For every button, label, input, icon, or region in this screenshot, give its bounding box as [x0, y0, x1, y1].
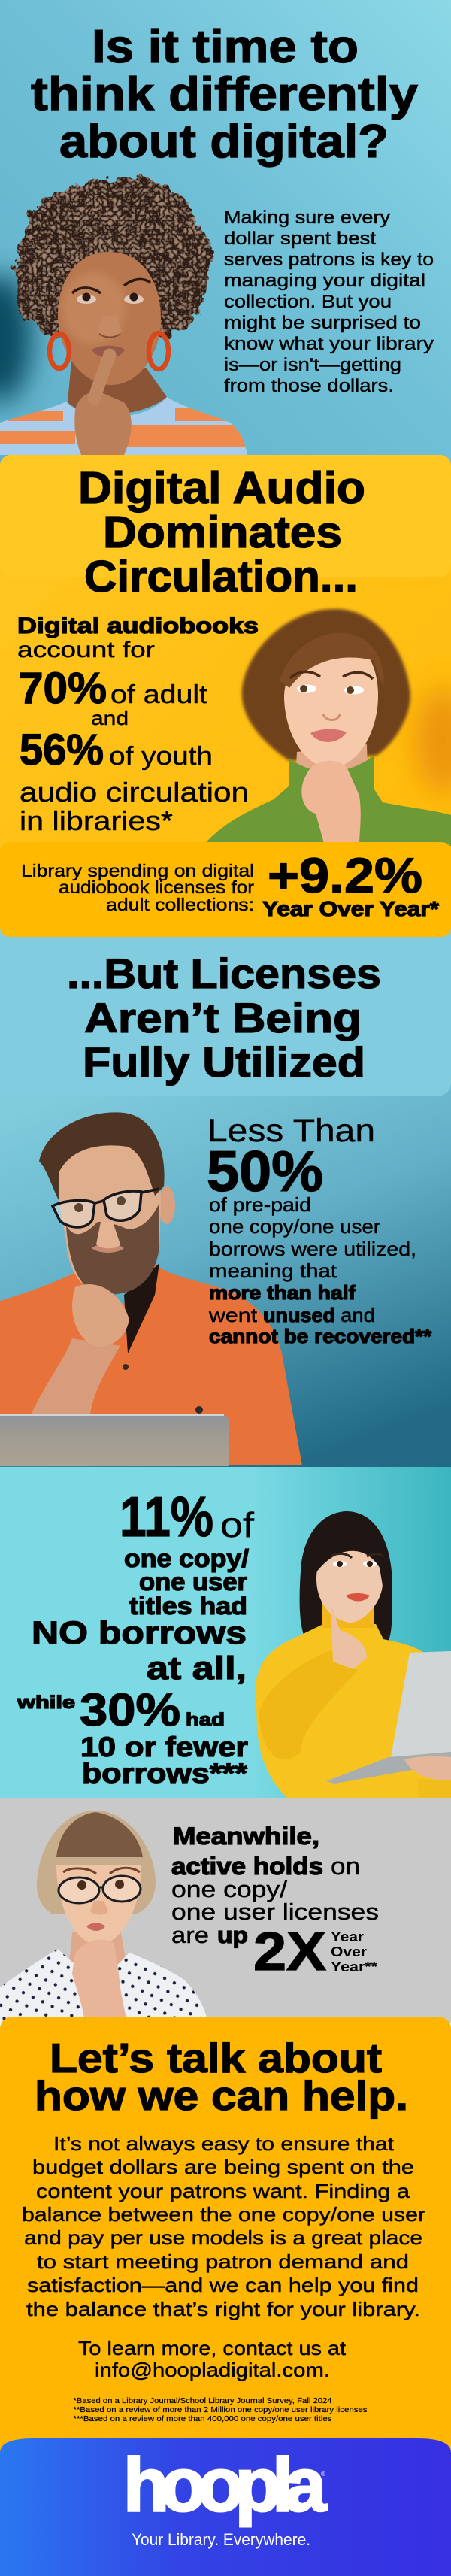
panel: hero intro	[0, 0, 451, 470]
text block: active holds: on	[331, 1853, 360, 1880]
text block: intro paragraph: Making sure every	[224, 208, 390, 228]
text block: body paragraph: satisfaction—and we can help you find	[27, 2274, 419, 2296]
panel: footer brand	[0, 2438, 451, 2576]
heading: lets talk: how we can help.	[35, 2072, 408, 2119]
logo: hoopla wordmark: ®	[321, 2471, 325, 2478]
photo: woman in yellow sweater with laptop	[256, 1511, 451, 1798]
text block: audiobook stats	[17, 614, 259, 836]
text block: body paragraph: balance between the one copy/one user	[22, 2203, 425, 2226]
text block: intro paragraph: might be surprised to	[224, 313, 421, 333]
text block: audiobook stats: audio circulation	[20, 777, 249, 808]
text block: tagline: Your Library. Everywhere.	[132, 2530, 310, 2549]
text block: less than 50 percent: cannot be recovered**	[209, 1325, 432, 1347]
text block: less than 50 percent: meaning that	[209, 1259, 337, 1282]
callout: spending up 9.2 percent: adult collections:	[106, 895, 254, 914]
icon: orange hoop earrings	[50, 333, 168, 369]
text block: less than 50 percent: one copy/one user	[209, 1215, 380, 1238]
panel: titles with no borrows	[0, 1467, 451, 1798]
text block: less than 50 percent	[207, 1113, 432, 1347]
text block: audiobook stats: 56%	[20, 726, 104, 774]
text block: eleven percent no borrows: one copy/	[124, 1544, 249, 1572]
heading: digital audio	[78, 463, 365, 602]
photo: woman with curly hair thinking	[0, 177, 247, 455]
text block: footnotes: **Based on a review of more than 2 Million one copy/one user library licenses	[74, 2406, 367, 2414]
text block: active holds: Year**	[331, 1959, 377, 1974]
logo: hoopla wordmark: hoopla	[123, 2443, 327, 2527]
text block: body paragraph: budget dollars are being spent on the	[32, 2156, 414, 2178]
heading: digital audio: Digital Audio	[78, 463, 365, 513]
text block: less than 50 percent: of pre-paid	[209, 1193, 311, 1216]
text block: contact line: To learn more, contact us at	[78, 2337, 347, 2359]
heading: main title	[31, 21, 419, 168]
text block: footnotes	[74, 2397, 367, 2423]
panel: licenses not fully utilized	[0, 937, 451, 1467]
text block: active holds: Meanwhile,	[173, 1823, 319, 1850]
panel: call to action	[0, 2017, 451, 2483]
text block: body paragraph	[22, 2132, 425, 2320]
text block: eleven percent no borrows: at all,	[147, 1650, 247, 1687]
text block: less than 50 percent: unused	[263, 1304, 335, 1326]
panel: digital audio dominates circulation	[0, 455, 451, 937]
text block: less than 50 percent: and	[341, 1304, 375, 1326]
text block: audiobook stats: account for	[17, 638, 155, 662]
text block: intro paragraph: collection. But you	[224, 292, 392, 312]
text block: audiobook stats: Digital audiobooks	[17, 614, 259, 638]
heading: main title: Is it time to	[92, 21, 359, 73]
text block: eleven percent no borrows: 11%	[120, 1485, 213, 1548]
text block: active holds: Over	[331, 1944, 367, 1959]
photo: bearded man with glasses at laptop	[0, 1112, 302, 1466]
callout: spending up 9.2 percent: +9.2%	[268, 847, 422, 903]
text block: eleven percent no borrows: while	[17, 1693, 75, 1713]
text block: eleven percent no borrows: 30%	[80, 1684, 180, 1735]
text block: audiobook stats: and	[91, 707, 129, 729]
text block: body paragraph: and pay per use models is a great place	[24, 2226, 422, 2249]
panel: active holds up 2X	[0, 1798, 451, 2023]
text block: body paragraph: content your patrons want. Finding a	[36, 2180, 410, 2202]
heading: digital audio: Circulation...	[84, 552, 358, 602]
text block: less than 50 percent: 50%	[207, 1140, 323, 1204]
text block: eleven percent no borrows: NO borrows	[32, 1615, 247, 1651]
callout: spending up 9.2 percent: audiobook licenses for	[59, 877, 254, 897]
heading: lets talk: Let’s talk about	[50, 2035, 382, 2081]
text block: body paragraph: It’s not always easy to ensure that	[53, 2132, 395, 2155]
text block: intro paragraph: is—or isn't—getting	[224, 355, 401, 375]
text block: less than 50 percent: Less Than	[207, 1113, 375, 1149]
text block: less than 50 percent: borrows were utilized,	[209, 1238, 416, 1260]
text block: intro paragraph: dollar spent best	[224, 229, 376, 249]
text block: contact line	[78, 2337, 347, 2381]
photo: woman with short brown hair	[203, 609, 451, 846]
heading: but licenses: ...But Licenses	[67, 950, 381, 997]
text block: body paragraph: to start meeting patron demand and	[37, 2250, 409, 2273]
text block: less than 50 percent: went	[208, 1304, 258, 1326]
text block: audiobook stats: 70%	[19, 664, 107, 713]
text block: active holds: 2X	[253, 1922, 326, 1982]
text block: eleven percent no borrows	[17, 1485, 254, 1789]
text block: intro paragraph	[224, 208, 434, 396]
text block: eleven percent no borrows: of	[220, 1505, 254, 1544]
text block: contact line: info@hoopladigital.com.	[95, 2359, 330, 2381]
text block: active holds: one user licenses	[171, 1899, 379, 1925]
heading: but licenses: Fully Utilized	[83, 1038, 365, 1086]
text block: audiobook stats: of adult	[110, 680, 208, 709]
icon: laptop	[326, 1651, 451, 1784]
text block: eleven percent no borrows: had	[186, 1710, 225, 1730]
callout: spending up 9.2 percent: Year Over Year*	[262, 897, 439, 920]
text block: intro paragraph: know what your library	[224, 334, 434, 354]
icon: laptop	[0, 1414, 229, 1466]
text block: active holds: active holds	[171, 1853, 323, 1880]
text block: audiobook stats: of youth	[109, 742, 213, 771]
heading: but licenses: Aren’t Being	[84, 994, 362, 1041]
heading: but licenses	[67, 950, 381, 1086]
text block: footnotes: ***Based on a review of more than 400,000 one copy/one user titles	[74, 2415, 332, 2423]
heading: digital audio: Dominates	[103, 508, 342, 557]
heading: lets talk	[35, 2035, 408, 2119]
text block: intro paragraph: serves patrons is key to	[224, 250, 434, 270]
text block: active holds: up	[217, 1922, 248, 1948]
callout: spending up 9.2 percent: Library spending on digital	[21, 861, 254, 880]
text block: eleven percent no borrows: borrows***	[82, 1758, 248, 1789]
text block: active holds: are	[171, 1922, 209, 1948]
text block: active holds: Year	[331, 1929, 364, 1944]
text block: eleven percent no borrows: 10 or fewer	[80, 1732, 248, 1762]
text block: audiobook stats: in libraries*	[20, 805, 173, 836]
photo: woman with blonde bob and round glasses	[0, 1811, 208, 2023]
callout: spending up 9.2 percent	[0, 842, 451, 937]
text block: less than 50 percent: more than half	[209, 1281, 356, 1304]
icon: round glasses	[59, 1876, 141, 1903]
icon: black rimmed glasses	[53, 1189, 159, 1227]
text block: footnotes: *Based on a Library Journal/School Library Journal Survey, Fall 2024	[74, 2397, 332, 2405]
text block: eleven percent no borrows: titles had	[129, 1592, 247, 1620]
text block: eleven percent no borrows: one user	[139, 1568, 247, 1596]
heading: main title: about digital?	[59, 116, 389, 168]
text block: intro paragraph: managing your digital	[224, 271, 425, 291]
text block: intro paragraph: from those dollars.	[224, 376, 394, 396]
text block: body paragraph: the balance that’s right for your library.	[26, 2298, 420, 2320]
heading: main title: think differently	[31, 68, 419, 120]
text block: active holds: one copy/	[171, 1876, 287, 1902]
text block: active holds	[171, 1823, 379, 1982]
